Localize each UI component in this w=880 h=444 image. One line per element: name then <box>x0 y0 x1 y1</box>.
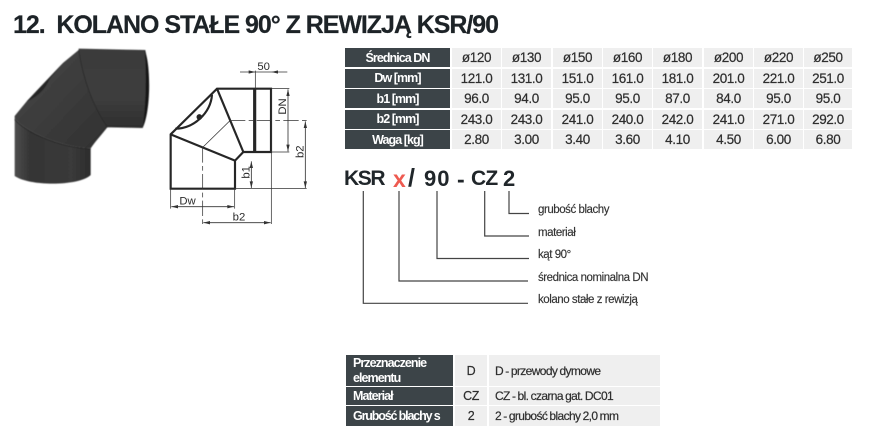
row: Średnica DN <box>345 48 852 67</box>
dimension labels: 50 <box>257 61 270 73</box>
row: Materiał: Materiał <box>353 389 393 403</box>
dimension arrowheads <box>171 70 307 224</box>
code: KSR x / 90 - CZ 2: - <box>457 166 465 192</box>
row: Dw: 131.0 <box>511 70 542 86</box>
row: Dw: 181.0 <box>662 70 693 86</box>
row: b1: 96.0 <box>464 91 489 106</box>
row: Średnica DN: ø180 <box>663 50 692 65</box>
row: Materiał: CZ - bl. czarna gat. DC01 <box>495 389 613 403</box>
row: Przeznaczenie elementu: D <box>467 364 475 378</box>
row: Waga: 3.00 <box>514 132 539 147</box>
row: b2: b2 [mm] <box>377 112 418 126</box>
elbow upper segment <box>79 49 148 128</box>
row: b1: 87.0 <box>665 91 690 106</box>
row: Dw: 201.0 <box>713 70 744 86</box>
row: b1 <box>345 89 852 108</box>
dimension labels <box>179 61 306 224</box>
code: KSR x / 90 - CZ 2: 90 <box>424 166 450 191</box>
row: Średnica DN: ø200 <box>714 50 743 65</box>
centre lines <box>171 71 307 224</box>
label: kąt 90°: kąt 90° <box>538 249 571 261</box>
photo: black elbow pipe <box>14 48 150 184</box>
dimension labels: b2 <box>294 145 306 158</box>
row: Waga: 2.80 <box>464 132 489 147</box>
row: Dw <box>345 69 852 88</box>
row: Materiał <box>346 387 660 405</box>
row: b1: 95.0 <box>816 91 840 106</box>
dimension labels: b2 <box>233 212 245 224</box>
row: Średnica DN: Średnica DN <box>366 50 429 64</box>
row: b1: b1 [mm] <box>377 92 418 106</box>
row: Przeznaczenie elementu: D - przewody dymowe <box>495 364 600 378</box>
row: Grubość blachy s <box>346 406 660 426</box>
row: Waga: 6.00 <box>766 132 791 147</box>
row: Dw: 121.0 <box>461 70 492 86</box>
row: b1: 95.0 <box>766 91 791 106</box>
row: Dw: 151.0 <box>562 70 593 86</box>
dimension labels: Dw <box>179 196 197 208</box>
row: Waga: 4.10 <box>665 132 690 147</box>
dimension lines <box>171 72 305 223</box>
code: KSR x / 90 - CZ 2: KSR <box>344 167 384 190</box>
row: Grubość blachy s: Grubość blachy s <box>353 409 440 423</box>
row: b2 <box>345 110 852 129</box>
dimension labels: b1 <box>240 166 252 179</box>
row: b1: 95.0 <box>565 91 590 106</box>
row: Dw: 221.0 <box>763 70 794 86</box>
code: KSR x / 90 - CZ 2: CZ <box>471 167 497 190</box>
pipe mouth <box>143 50 149 128</box>
row: Dw: Dw [mm] <box>374 71 421 85</box>
row: Waga: 3.60 <box>615 132 640 147</box>
title: 12. KOLANO STAŁE 90° Z REWIZJĄ KSR/90 <box>13 11 498 39</box>
label: grubość blachy: grubość blachy <box>538 204 609 216</box>
row: Waga: 4.50 <box>716 132 741 147</box>
row: Waga <box>345 130 852 149</box>
row: Grubość blachy s: 2 - grubość blachy 2,0 mm <box>495 409 618 423</box>
product code diagram <box>344 164 648 306</box>
row: b1: 94.0 <box>514 91 539 106</box>
row: b2: 243.0 <box>461 112 492 126</box>
row: Waga: 6.80 <box>816 132 840 147</box>
revision knob <box>196 114 202 120</box>
revision cover <box>27 63 63 101</box>
row: b2: 241.0 <box>713 112 744 126</box>
row: Dw: 161.0 <box>612 70 643 86</box>
row: Średnica DN: ø160 <box>613 50 642 65</box>
row: Grubość blachy s: 2 <box>468 409 474 423</box>
code: KSR x / 90 - CZ 2: x <box>393 166 406 192</box>
row: Przeznaczenie elementu <box>346 355 660 386</box>
row: b2: 292.0 <box>812 112 844 126</box>
dimension labels: DN <box>277 98 289 115</box>
row: Dw: 251.0 <box>812 70 844 86</box>
row: Przeznaczenie elementu: Przeznaczenie <box>353 356 426 370</box>
row: Średnica DN: ø250 <box>813 50 843 65</box>
label: średnica nominalna DN: średnica nominalna DN <box>538 272 648 284</box>
code: KSR x / 90 - CZ 2: / <box>408 164 415 192</box>
row: b1: 95.0 <box>615 91 640 106</box>
material legend table <box>346 355 660 426</box>
row: Materiał: CZ <box>463 389 479 403</box>
row: Średnica DN: ø120 <box>462 50 491 65</box>
elbow outline <box>171 89 271 189</box>
row: Średnica DN: ø130 <box>512 50 541 65</box>
row: Średnica DN: ø150 <box>563 50 592 65</box>
elbow lower segment <box>15 118 91 184</box>
code: KSR x / 90 - CZ 2: 2 <box>503 166 515 191</box>
row: Waga: 3.40 <box>565 132 590 147</box>
code: KSR x / 90 - CZ 2 <box>344 164 515 192</box>
row: Waga: Waga [kg] <box>372 132 423 146</box>
row: b2: 271.0 <box>763 112 794 126</box>
technical drawing <box>170 61 307 224</box>
row: b2: 240.0 <box>612 112 643 126</box>
row: b2: 242.0 <box>662 112 693 126</box>
row: Przeznaczenie elementu: elementu <box>353 370 400 384</box>
label: kolano stałe z rewizją: kolano stałe z rewizją <box>538 294 637 306</box>
row: b1: 84.0 <box>716 91 741 106</box>
specification table <box>345 48 852 149</box>
elbow middle segment <box>15 50 107 148</box>
row: b2: 241.0 <box>562 112 593 126</box>
label: materiał: materiał <box>538 227 575 239</box>
connector lines <box>362 191 529 304</box>
row: Średnica DN: ø220 <box>764 50 793 65</box>
row: b2: 243.0 <box>511 112 542 126</box>
